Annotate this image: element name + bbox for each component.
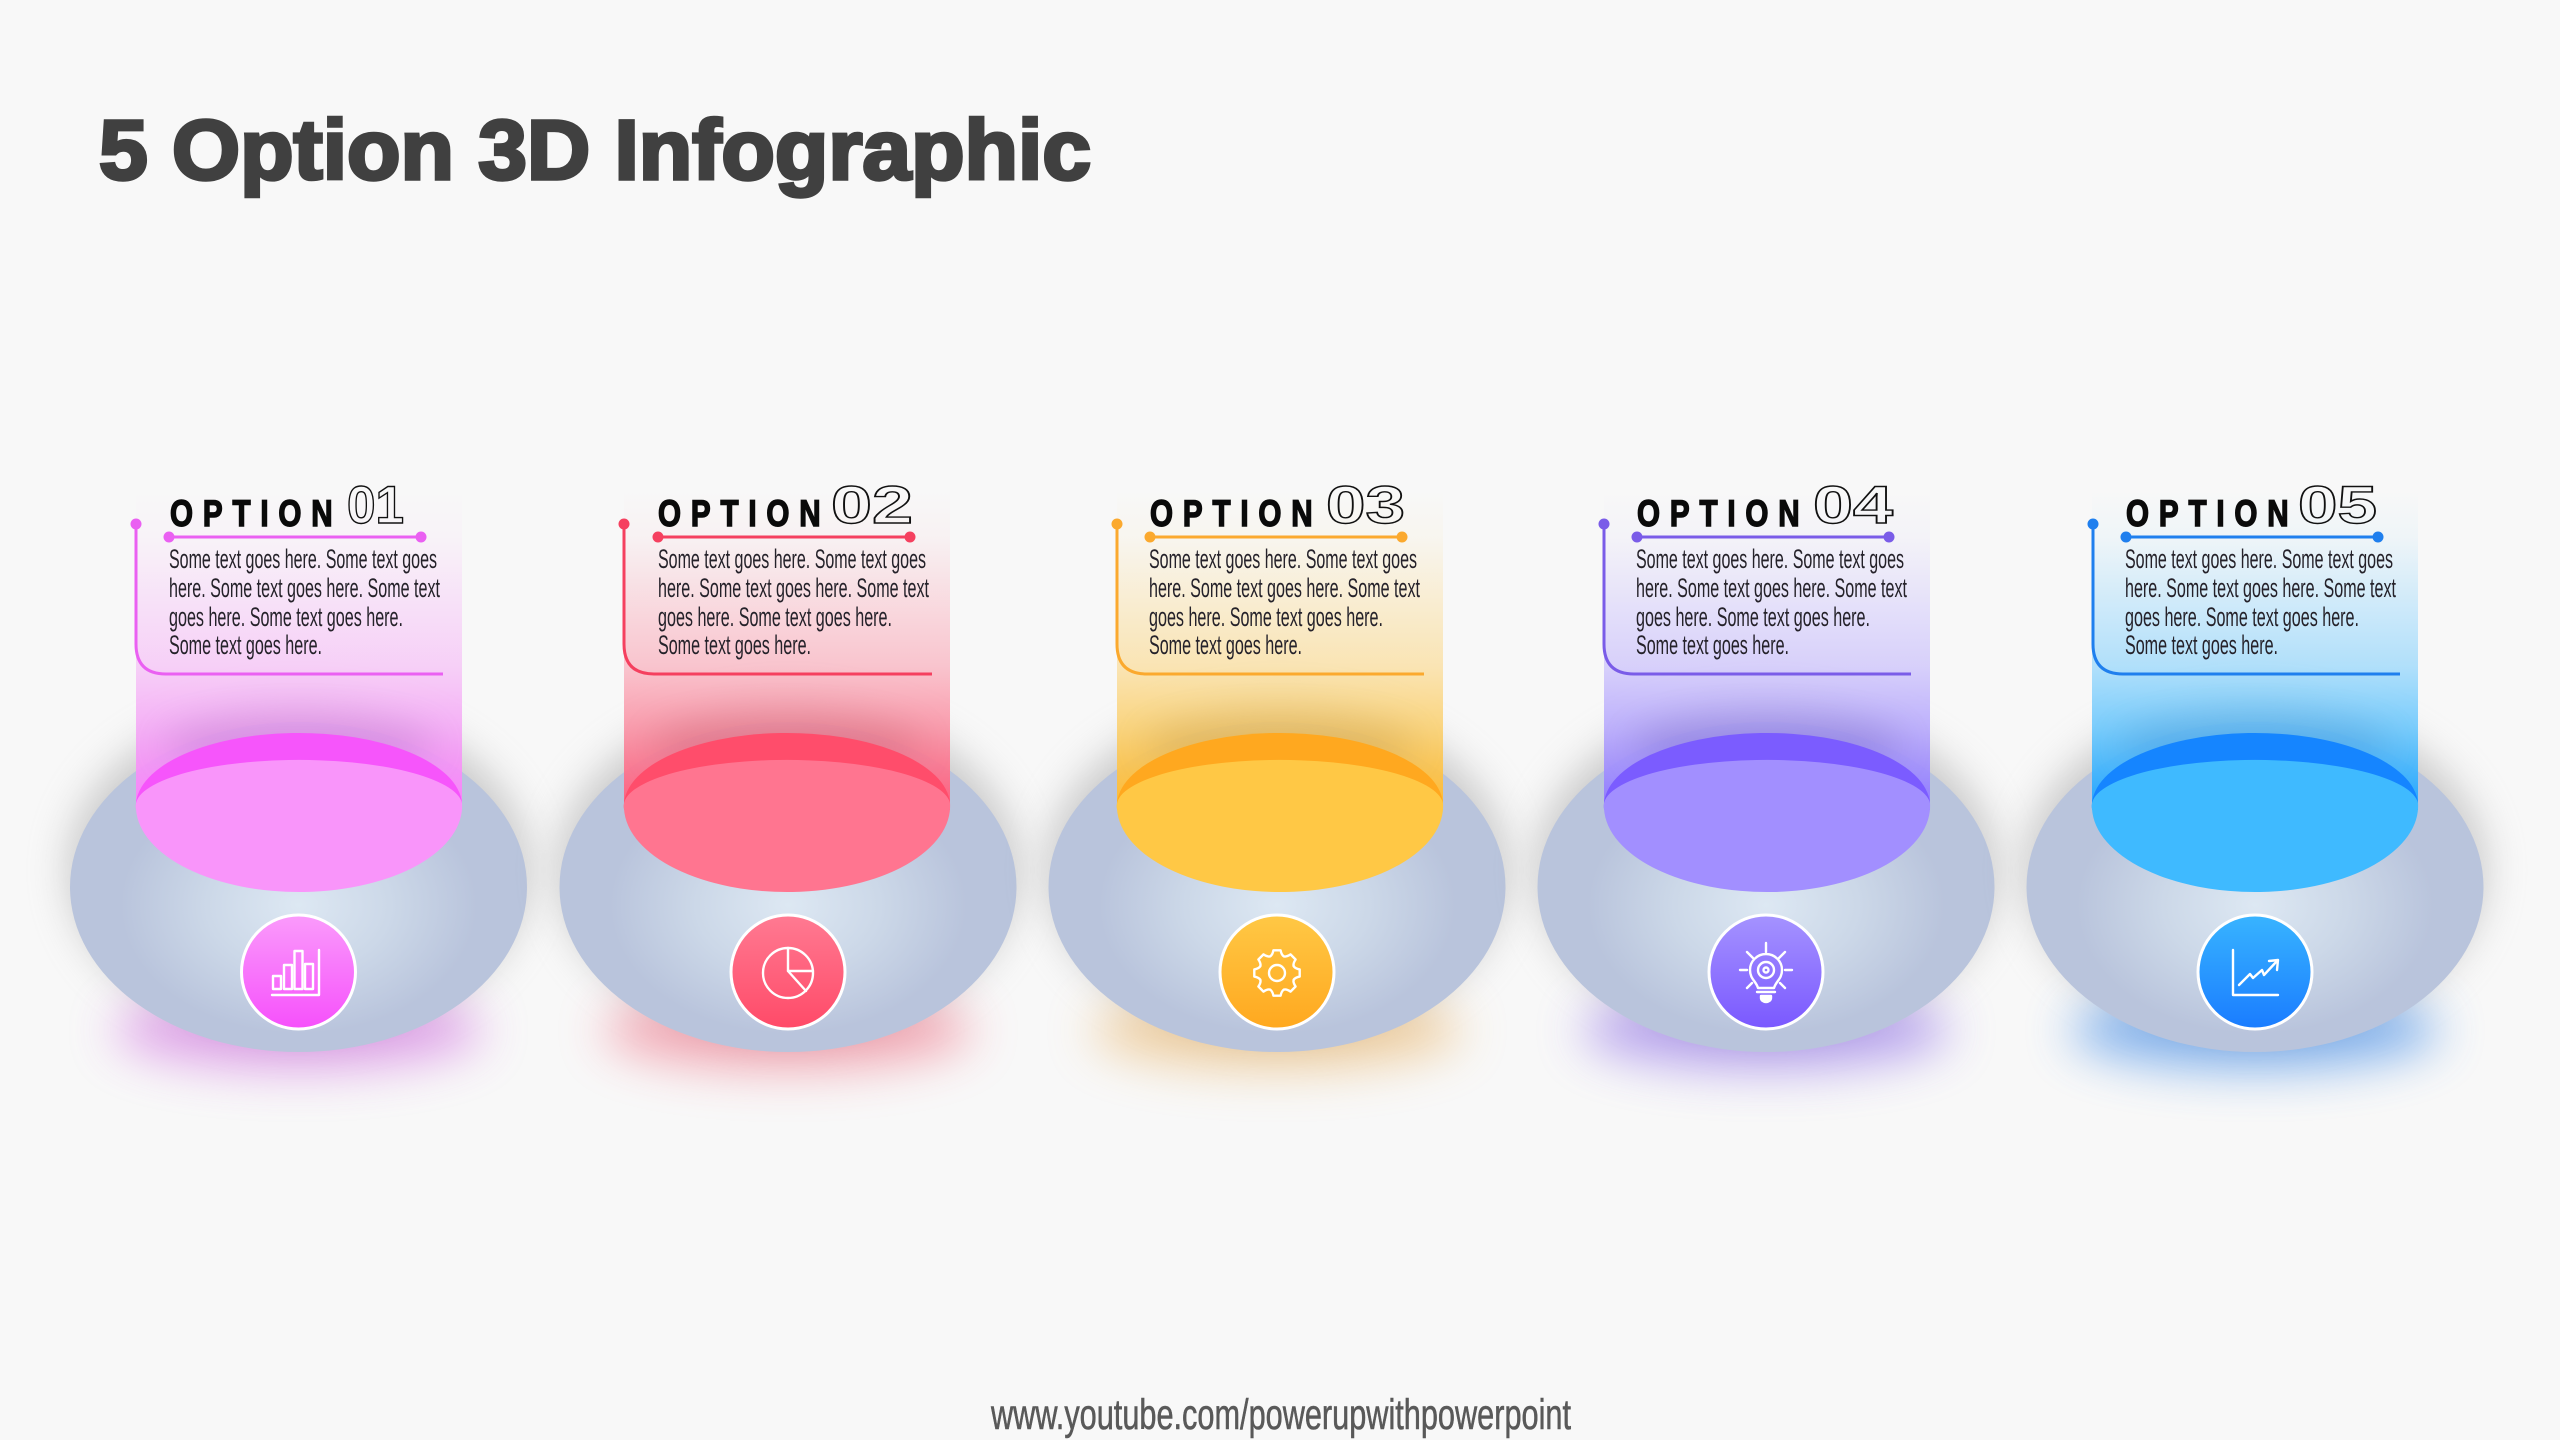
heading: option 3: OPTION <box>1150 494 1323 535</box>
panel: option 2 <box>558 476 1018 1070</box>
connector line: option 4 <box>1598 518 1911 674</box>
text block: option 4 <box>1636 544 1907 660</box>
text block: option 1: Some text goes here. <box>169 630 322 660</box>
text block: option 5: goes here. Some text goes here. <box>2125 602 2359 632</box>
heading: option 3 <box>1144 476 1408 542</box>
footer url: www.youtube.com/powerupwithpowerpoint <box>990 1391 1571 1439</box>
heading: option 1: OPTION <box>170 494 343 535</box>
text block: option 2: goes here. Some text goes here. <box>658 602 892 632</box>
text block: option 1: goes here. Some text goes here. <box>169 602 403 632</box>
text block: option 3: Some text goes here. <box>1149 630 1302 660</box>
heading: option 4: OPTION <box>1637 494 1810 535</box>
platform: option 2 <box>558 704 1018 1070</box>
heading: option 2 <box>652 476 916 542</box>
heading: option 2: OPTION <box>658 494 831 535</box>
text block: option 4: here. Some text goes here. Some text <box>1636 573 1907 603</box>
text block: option 1: here. Some text goes here. Some text <box>169 573 440 603</box>
cylinder: option 4 <box>1604 548 1930 892</box>
platform: option 5 <box>2025 704 2485 1070</box>
heading: option 4 <box>1632 476 1894 542</box>
platform: option 3 <box>1047 704 1507 1070</box>
text block: option 4: Some text goes here. Some text goes <box>1636 544 1904 574</box>
cylinder: option 5 <box>2092 532 2418 892</box>
panel: option 4 <box>1536 476 1996 1070</box>
heading: option 3: 03 <box>1326 476 1405 535</box>
text block: option 3 <box>1149 544 1420 660</box>
cylinder: option 1 <box>136 548 462 892</box>
text block: option 3: goes here. Some text goes here. <box>1149 602 1383 632</box>
panel: option 1 <box>68 476 528 1070</box>
connector line: option 2 <box>618 518 932 674</box>
text block: option 1 <box>169 544 440 660</box>
heading: option 5 <box>2120 476 2384 542</box>
text block: option 4: goes here. Some text goes here. <box>1636 602 1870 632</box>
heading: option 5: OPTION <box>2126 494 2299 535</box>
heading: option 1: 01 <box>347 476 404 535</box>
title: 5 Option 3D Infographic <box>99 103 1091 197</box>
text block: option 2 <box>658 544 929 660</box>
heading: option 1 <box>164 476 426 542</box>
heading: option 2: 02 <box>831 476 913 535</box>
connector line: option 3 <box>1112 518 1424 674</box>
text block: option 3: Some text goes here. Some text goes <box>1149 544 1417 574</box>
platform: option 1 <box>68 704 528 1070</box>
cylinder: option 2 <box>624 542 950 892</box>
text block: option 3: here. Some text goes here. Some text <box>1149 573 1420 603</box>
text block: option 1: Some text goes here. Some text goes <box>169 544 437 574</box>
icon: gear <box>1220 915 1334 1029</box>
icon: pie chart <box>731 915 845 1029</box>
heading: option 5: 05 <box>2298 476 2377 535</box>
connector line: option 5 <box>2088 518 2400 674</box>
text block: option 5 <box>2125 544 2396 660</box>
text block: option 2: Some text goes here. <box>658 630 811 660</box>
text block: option 4: Some text goes here. <box>1636 630 1789 660</box>
panel: option 3 <box>1047 476 1507 1070</box>
heading: option 4: 04 <box>1813 476 1894 535</box>
panel: option 5 <box>2025 476 2485 1070</box>
text block: option 2: here. Some text goes here. Some text <box>658 573 929 603</box>
platform: option 4 <box>1536 704 1996 1070</box>
icon: light bulb <box>1709 915 1823 1029</box>
connector line: option 1 <box>130 518 443 674</box>
text block: option 5: Some text goes here. <box>2125 630 2278 660</box>
text block: option 2: Some text goes here. Some text goes <box>658 544 926 574</box>
cylinder: option 3 <box>1116 534 1444 892</box>
icon: line chart with arrow <box>2198 915 2312 1029</box>
icon: bar chart <box>242 915 356 1029</box>
